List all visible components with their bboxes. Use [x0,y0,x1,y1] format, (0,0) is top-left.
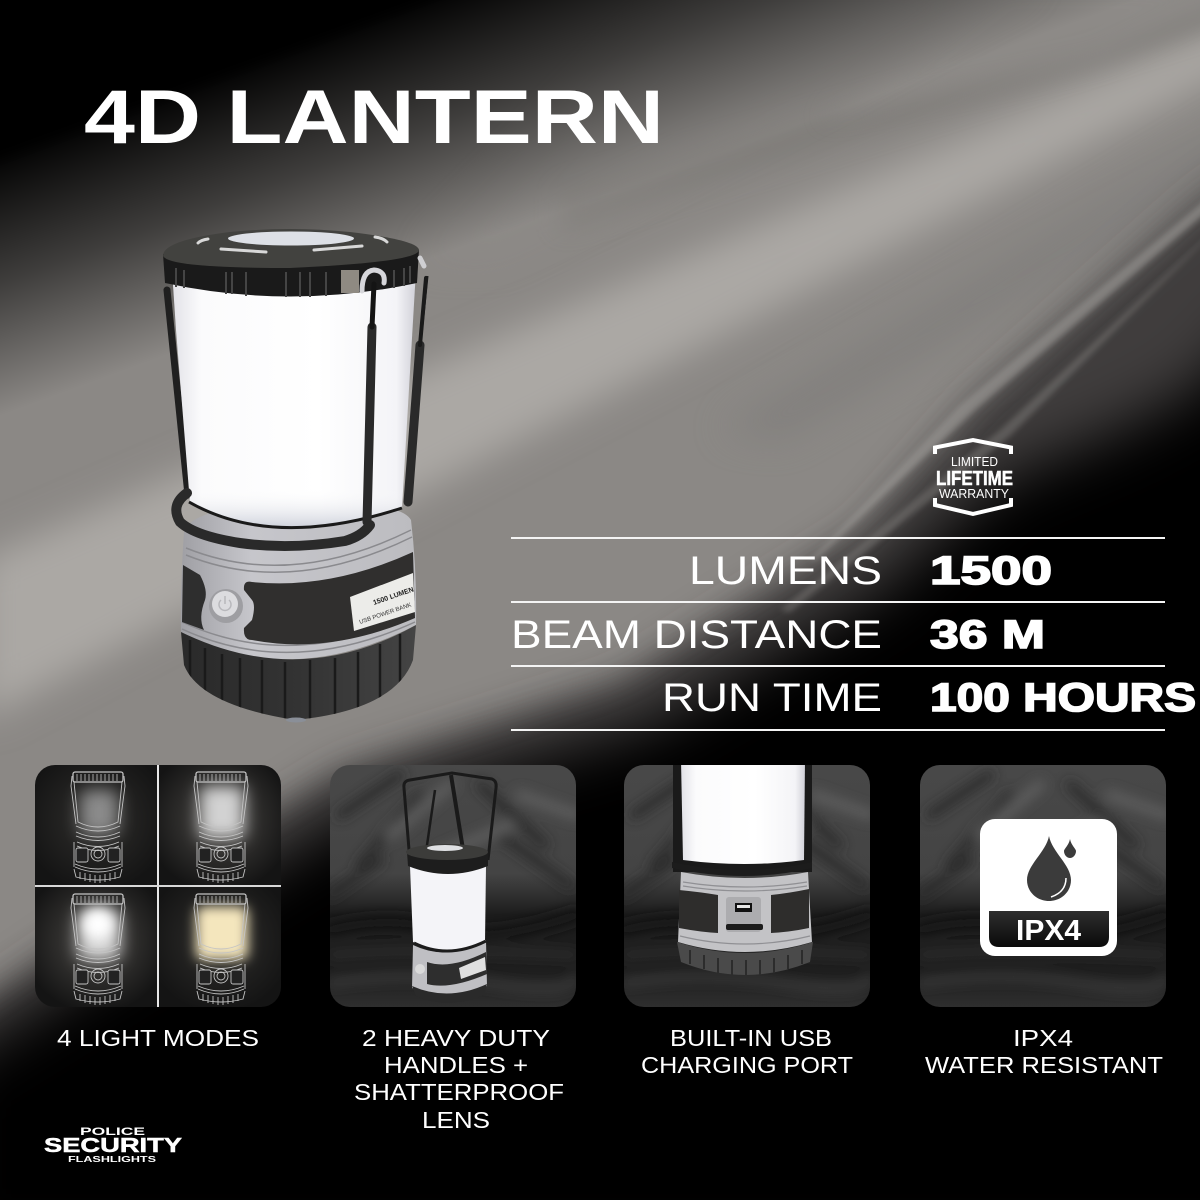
mode: high glow [71,894,125,1005]
warranty badge: WARRANTY [939,486,1009,501]
icon: large water drop [1027,836,1071,901]
lantern with raised handles [404,773,496,1003]
icon: IPX4 badge: IPX4 [1016,915,1081,947]
panel: handles and shatterproof lens [330,765,576,1007]
power button [209,589,243,623]
warranty badge [935,440,1013,514]
panel: IPX4 water resistant [920,765,1166,1007]
spec: lumens: 1500 [930,549,1052,593]
translucent lens [172,270,416,527]
brand logo: POLICE [80,1126,145,1138]
caption: handles and lens: 2 HEAVY DUTY [362,1025,550,1051]
mode: warm glow [194,894,248,1005]
brand logo: FLASHLIGHTS [68,1155,157,1164]
top cap [163,229,419,297]
brand logo: SECURITY [44,1135,183,1157]
caption: water resistance [925,1025,1163,1078]
icon: IPX4 badge [980,819,1117,956]
spec: beam distance: BEAM DISTANCE [511,613,882,657]
caption: handles and lens: SHATTERPROOF [354,1079,564,1105]
caption: USB port: CHARGING PORT [641,1052,853,1078]
specifications table [511,537,1196,731]
caption: water resistance: IPX4 [1013,1025,1073,1051]
spec label [350,573,415,631]
caption: 4 light modes: 4 LIGHT MODES [57,1025,259,1051]
caption: USB port: BUILT-IN USB [670,1025,832,1051]
left dark panel [182,565,206,630]
bottom ribbed foot [181,625,416,726]
caption: handles and lens: LENS [422,1107,490,1133]
spec: run time: RUN TIME [662,676,882,720]
spec: run time [662,676,1196,720]
rear handle [167,290,188,495]
title: 4D LANTERN [84,75,664,160]
spec: beam distance [511,613,1045,657]
right rear handle wire [420,276,427,345]
grey base body [181,500,416,659]
front dark panel [244,552,415,644]
panel: USB charging port [624,760,870,1007]
product photo: lantern [163,229,427,726]
spec: beam distance: 36 M [930,613,1045,657]
spec: lumens [689,549,1052,593]
caption: handles and lens: HANDLES + [384,1052,528,1078]
warranty badge: LIMITED [951,454,998,469]
spec: run time: 100 HOURS [930,676,1196,720]
caption: handles and lens [354,1025,564,1133]
spec label: USB POWER BANK [359,602,412,626]
front handle [362,270,384,522]
caption: water resistance: WATER RESISTANT [925,1052,1163,1078]
right handle [408,258,426,502]
icon: small water drop [1064,839,1076,858]
spec label: 1500 LUMEN [372,586,415,607]
brand logo [44,1126,183,1164]
lower rim [189,502,402,528]
panel: 4 light modes [35,765,281,1007]
lantern base with USB port [672,760,813,975]
spec: lumens: LUMENS [689,549,882,593]
caption: USB port [641,1025,853,1078]
foam handle ring [176,493,370,546]
warranty badge: LIFETIME [936,468,1013,490]
mode: medium glow [194,772,248,883]
mode: dim glow [71,772,125,883]
